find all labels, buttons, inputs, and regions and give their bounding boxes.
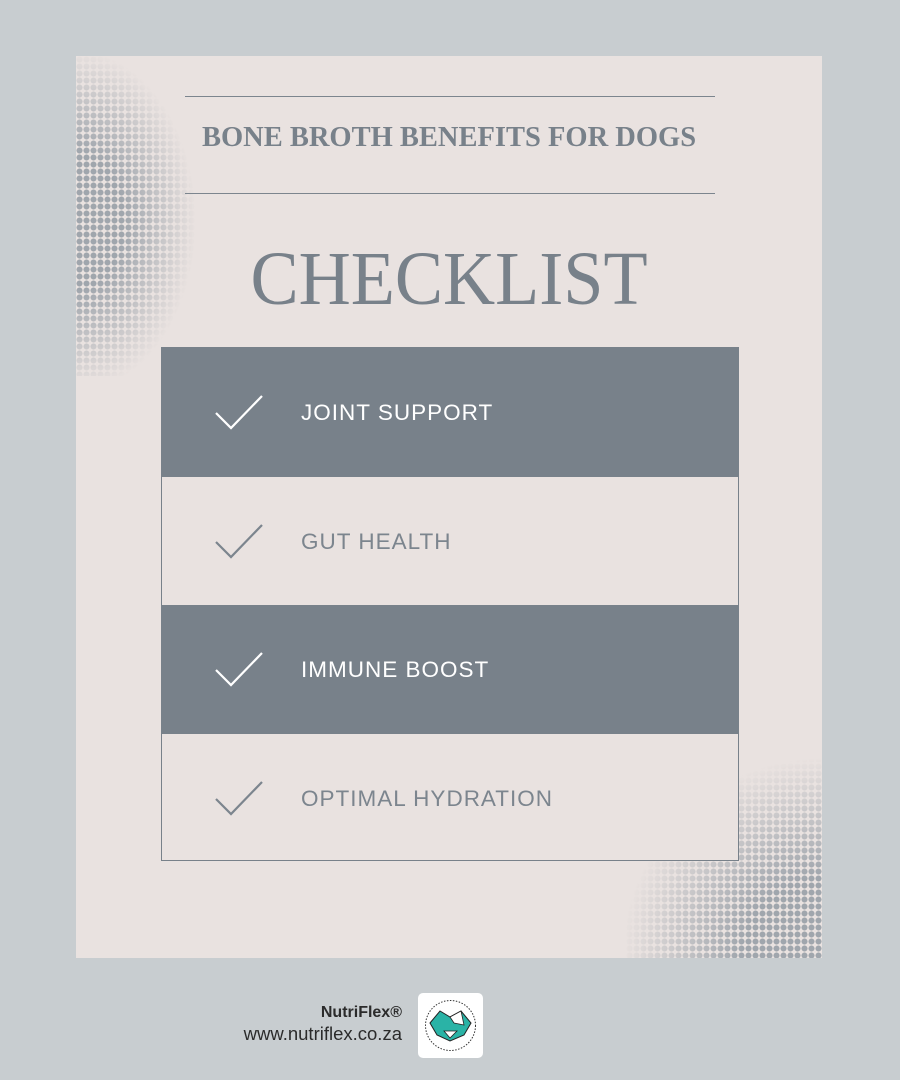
card <box>76 56 822 958</box>
footer brand text: www.nutriflex.co.za <box>244 1023 402 1044</box>
heading: checklist: CHECKLIST <box>250 237 648 321</box>
row: joint support <box>162 348 738 477</box>
row: immune boost <box>162 605 738 734</box>
logo <box>418 993 483 1058</box>
row: gut health: GUT HEALTH <box>301 528 451 554</box>
row: joint support: JOINT SUPPORT <box>301 400 493 424</box>
title: BONE BROTH BENEFITS FOR DOGS <box>202 122 696 153</box>
halftone bottom-right <box>636 772 822 958</box>
row: gut health <box>215 524 451 558</box>
row: optimal hydration <box>215 781 553 816</box>
footer brand text: NutriFlex® <box>321 1004 402 1021</box>
row: optimal hydration: OPTIMAL HYDRATION <box>301 786 553 810</box>
checklist table <box>161 347 739 861</box>
footer brand text <box>244 1004 402 1044</box>
halftone top-left <box>76 64 188 376</box>
row: immune boost: IMMUNE BOOST <box>301 656 489 682</box>
